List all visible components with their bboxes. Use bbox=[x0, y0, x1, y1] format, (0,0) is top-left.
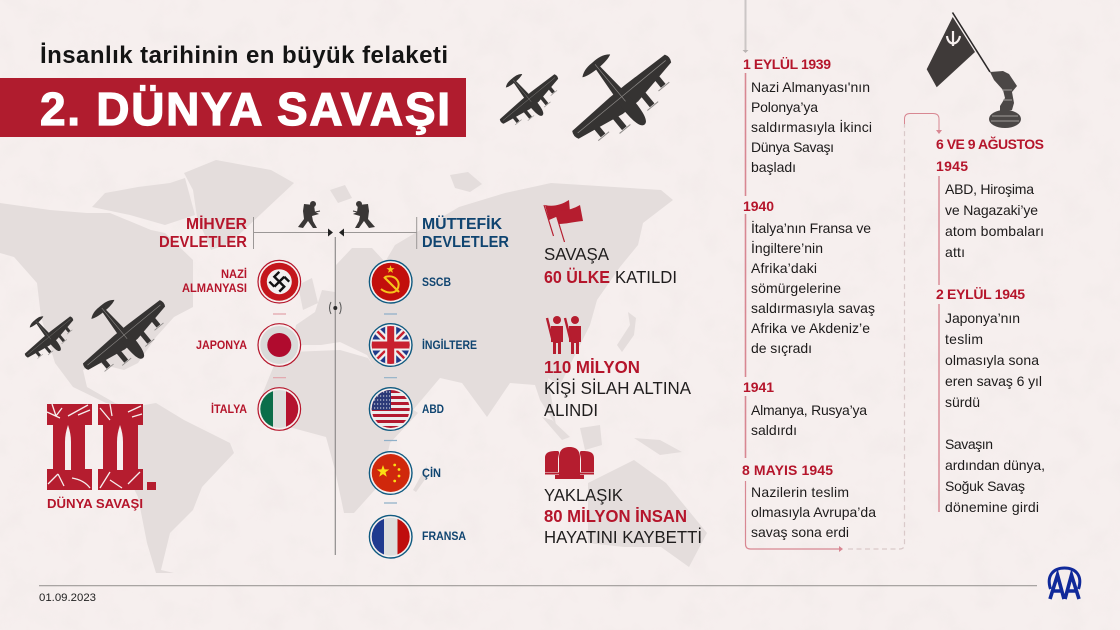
II. Dünya Savaşı emblem: DÜNYA SAVAŞI bbox=[47, 496, 143, 511]
timeline: 2 Eylül 1945 bbox=[936, 286, 1045, 515]
timeline: 6 ve 9 Ağustos: 6 VE 9 AĞUSTOS bbox=[936, 135, 1044, 152]
world map bbox=[0, 160, 707, 573]
label: SSCB: SSCB bbox=[422, 275, 451, 289]
timeline: 1 Eylül 1939: Dünya Savaşı bbox=[751, 139, 834, 155]
timeline: 1940 bbox=[743, 198, 875, 356]
timeline: 2 Eylül 1945: 2 EYLÜL 1945 bbox=[936, 286, 1025, 302]
flag: Japan bbox=[258, 324, 301, 366]
timeline: 8 Mayıs 1945: Nazilerin teslim bbox=[751, 484, 849, 500]
timeline: 2 Eylül 1945: Savaşın bbox=[945, 436, 993, 452]
timeline: 1941: Almanya, Rusya’ya bbox=[751, 402, 867, 418]
timeline: 8 Mayıs 1945: olmasıyla Avrupa’da bbox=[751, 504, 876, 520]
axis heading: DEVLETLER bbox=[159, 234, 247, 251]
label: Çin: ÇİN bbox=[422, 465, 441, 480]
stat: 110 milyon bbox=[544, 357, 691, 420]
stat: 60 ülke: 60 ÜLKE bbox=[544, 267, 610, 287]
separators bbox=[273, 314, 397, 503]
timeline: 2 Eylül 1945: Soğuk Savaş bbox=[945, 478, 1025, 494]
stat: 110 milyon: 110 MİLYON bbox=[544, 357, 640, 377]
axis heading: MİHVER bbox=[186, 215, 247, 233]
timeline: 6 ve 9 Ağustos bbox=[936, 135, 1044, 260]
flag: China bbox=[369, 452, 412, 494]
icon: soldier left bbox=[298, 201, 320, 228]
timeline: 1 Eylül 1939: 1 EYLÜL 1939 bbox=[743, 56, 831, 72]
footer line bbox=[39, 585, 1037, 587]
stat: 80 milyon: HAYATINI KAYBETTİ bbox=[544, 527, 702, 547]
flag: USA bbox=[369, 388, 412, 430]
timeline: 8 Mayıs 1945: 8 MAYIS 1945 bbox=[742, 462, 833, 478]
title: subtitle: İnsanlık tarihinin en büyük felaketi bbox=[40, 42, 448, 69]
stat: 110 milyon: KİŞİ SİLAH ALTINA bbox=[544, 378, 691, 398]
timeline: 1941 bbox=[743, 379, 867, 438]
timeline: 6 ve 9 Ağustos: atom bombaları bbox=[945, 223, 1044, 239]
stat: 60 ülke bbox=[544, 244, 677, 287]
timeline: 2 Eylül 1945: ardından dünya, bbox=[945, 457, 1045, 473]
icon: soldier right bbox=[353, 201, 375, 228]
timeline: 1 Eylül 1939: Polonya’ya bbox=[751, 99, 818, 115]
stat: 80 milyon: YAKLAŞIK bbox=[544, 485, 623, 505]
label: Fransa: FRANSA bbox=[422, 529, 466, 543]
label: İngiltere: İNGİLTERE bbox=[422, 337, 477, 352]
stat: 110 milyon: ALINDI bbox=[544, 400, 598, 420]
label: Nazi Almanyası bbox=[182, 266, 247, 295]
flag: UK bbox=[369, 324, 412, 366]
planes top bbox=[484, 23, 692, 164]
title banner: 2. DÜNYA SAVAŞI bbox=[40, 83, 450, 135]
timeline: 6 ve 9 Ağustos: attı bbox=[945, 244, 965, 260]
flag: USSR bbox=[369, 260, 412, 303]
timeline: 1941: saldırdı bbox=[751, 422, 797, 438]
allies heading: MÜTTEFİK bbox=[422, 214, 502, 233]
icon: soldiers bbox=[547, 316, 581, 354]
stat: 60 ülke: KATILDI bbox=[615, 267, 677, 287]
timeline: 2 Eylül 1945: olmasıyla sona bbox=[945, 352, 1039, 368]
II. Dünya Savaşı emblem bbox=[47, 404, 156, 511]
planes left bbox=[12, 274, 182, 391]
timeline: 8 Mayıs 1945: savaş sona erdi bbox=[751, 524, 849, 540]
label: Japonya: JAPONYA bbox=[196, 338, 247, 352]
label: Nazi Almanyası: NAZİ bbox=[221, 266, 247, 281]
stat: 80 milyon bbox=[544, 485, 702, 547]
timeline: 1940: Afrika’daki bbox=[751, 260, 817, 276]
center divider bbox=[330, 237, 341, 555]
timeline: 6 ve 9 Ağustos: ve Nagazaki’ye bbox=[945, 202, 1038, 218]
stat: 60 ülke: SAVAŞA bbox=[544, 244, 609, 264]
label: ABD: ABD bbox=[422, 402, 444, 416]
flag: France bbox=[369, 515, 412, 558]
label: İtalya: İTALYA bbox=[211, 401, 247, 416]
timeline: 1940: saldırmasıyla savaş bbox=[751, 300, 875, 316]
icon: tombstones bbox=[545, 447, 594, 479]
stat: 80 milyon: 80 MİLYON İNSAN bbox=[544, 506, 687, 526]
timeline: 6 ve 9 Ağustos: ABD, Hiroşima bbox=[945, 181, 1034, 197]
icon: soldier raising flag bbox=[927, 12, 1021, 128]
timeline: 2 Eylül 1945: teslim bbox=[945, 331, 983, 347]
timeline: 1 Eylül 1939: başladı bbox=[751, 159, 796, 175]
label: Nazi Almanyası: ALMANYASI bbox=[182, 281, 247, 295]
timeline: 2 Eylül 1945: sürdü bbox=[945, 394, 980, 410]
allies heading: DEVLETLER bbox=[422, 234, 509, 251]
timeline: 1940: Afrika ve Akdeniz’e bbox=[751, 320, 870, 336]
timeline: 1940: sömürgelerine bbox=[751, 280, 841, 296]
timeline: 1941: 1941 bbox=[743, 379, 774, 395]
allies heading bbox=[339, 214, 509, 251]
logo: AA bbox=[1049, 568, 1080, 599]
timeline connectors bbox=[742, 0, 942, 552]
date: 01.09.2023 bbox=[39, 592, 96, 604]
timeline: 1 Eylül 1939 bbox=[743, 56, 872, 175]
timeline: 1940: 1940 bbox=[743, 198, 774, 214]
flag: Italy bbox=[258, 388, 301, 430]
timeline: 8 Mayıs 1945 bbox=[742, 462, 876, 540]
timeline: 6 ve 9 Ağustos: 1945 bbox=[936, 158, 968, 174]
icon: flags bbox=[544, 200, 583, 242]
axis heading bbox=[159, 215, 333, 251]
timeline: 2 Eylül 1945: eren savaş 6 yıl bbox=[945, 373, 1042, 389]
timeline: 1940: de sıçradı bbox=[751, 340, 812, 356]
timeline: 2 Eylül 1945: Japonya’nın bbox=[945, 310, 1020, 326]
timeline: 1940: İtalya’nın Fransa ve bbox=[751, 219, 871, 236]
timeline: 1 Eylül 1939: Nazi Almanyası'nın bbox=[751, 79, 870, 95]
timeline: 1 Eylül 1939: saldırmasıyla İkinci bbox=[751, 118, 872, 135]
timeline: 1940: İngiltere’nin bbox=[751, 239, 823, 256]
flag: Nazi Germany bbox=[258, 260, 301, 303]
timeline: 2 Eylül 1945: dönemine girdi bbox=[945, 499, 1039, 515]
